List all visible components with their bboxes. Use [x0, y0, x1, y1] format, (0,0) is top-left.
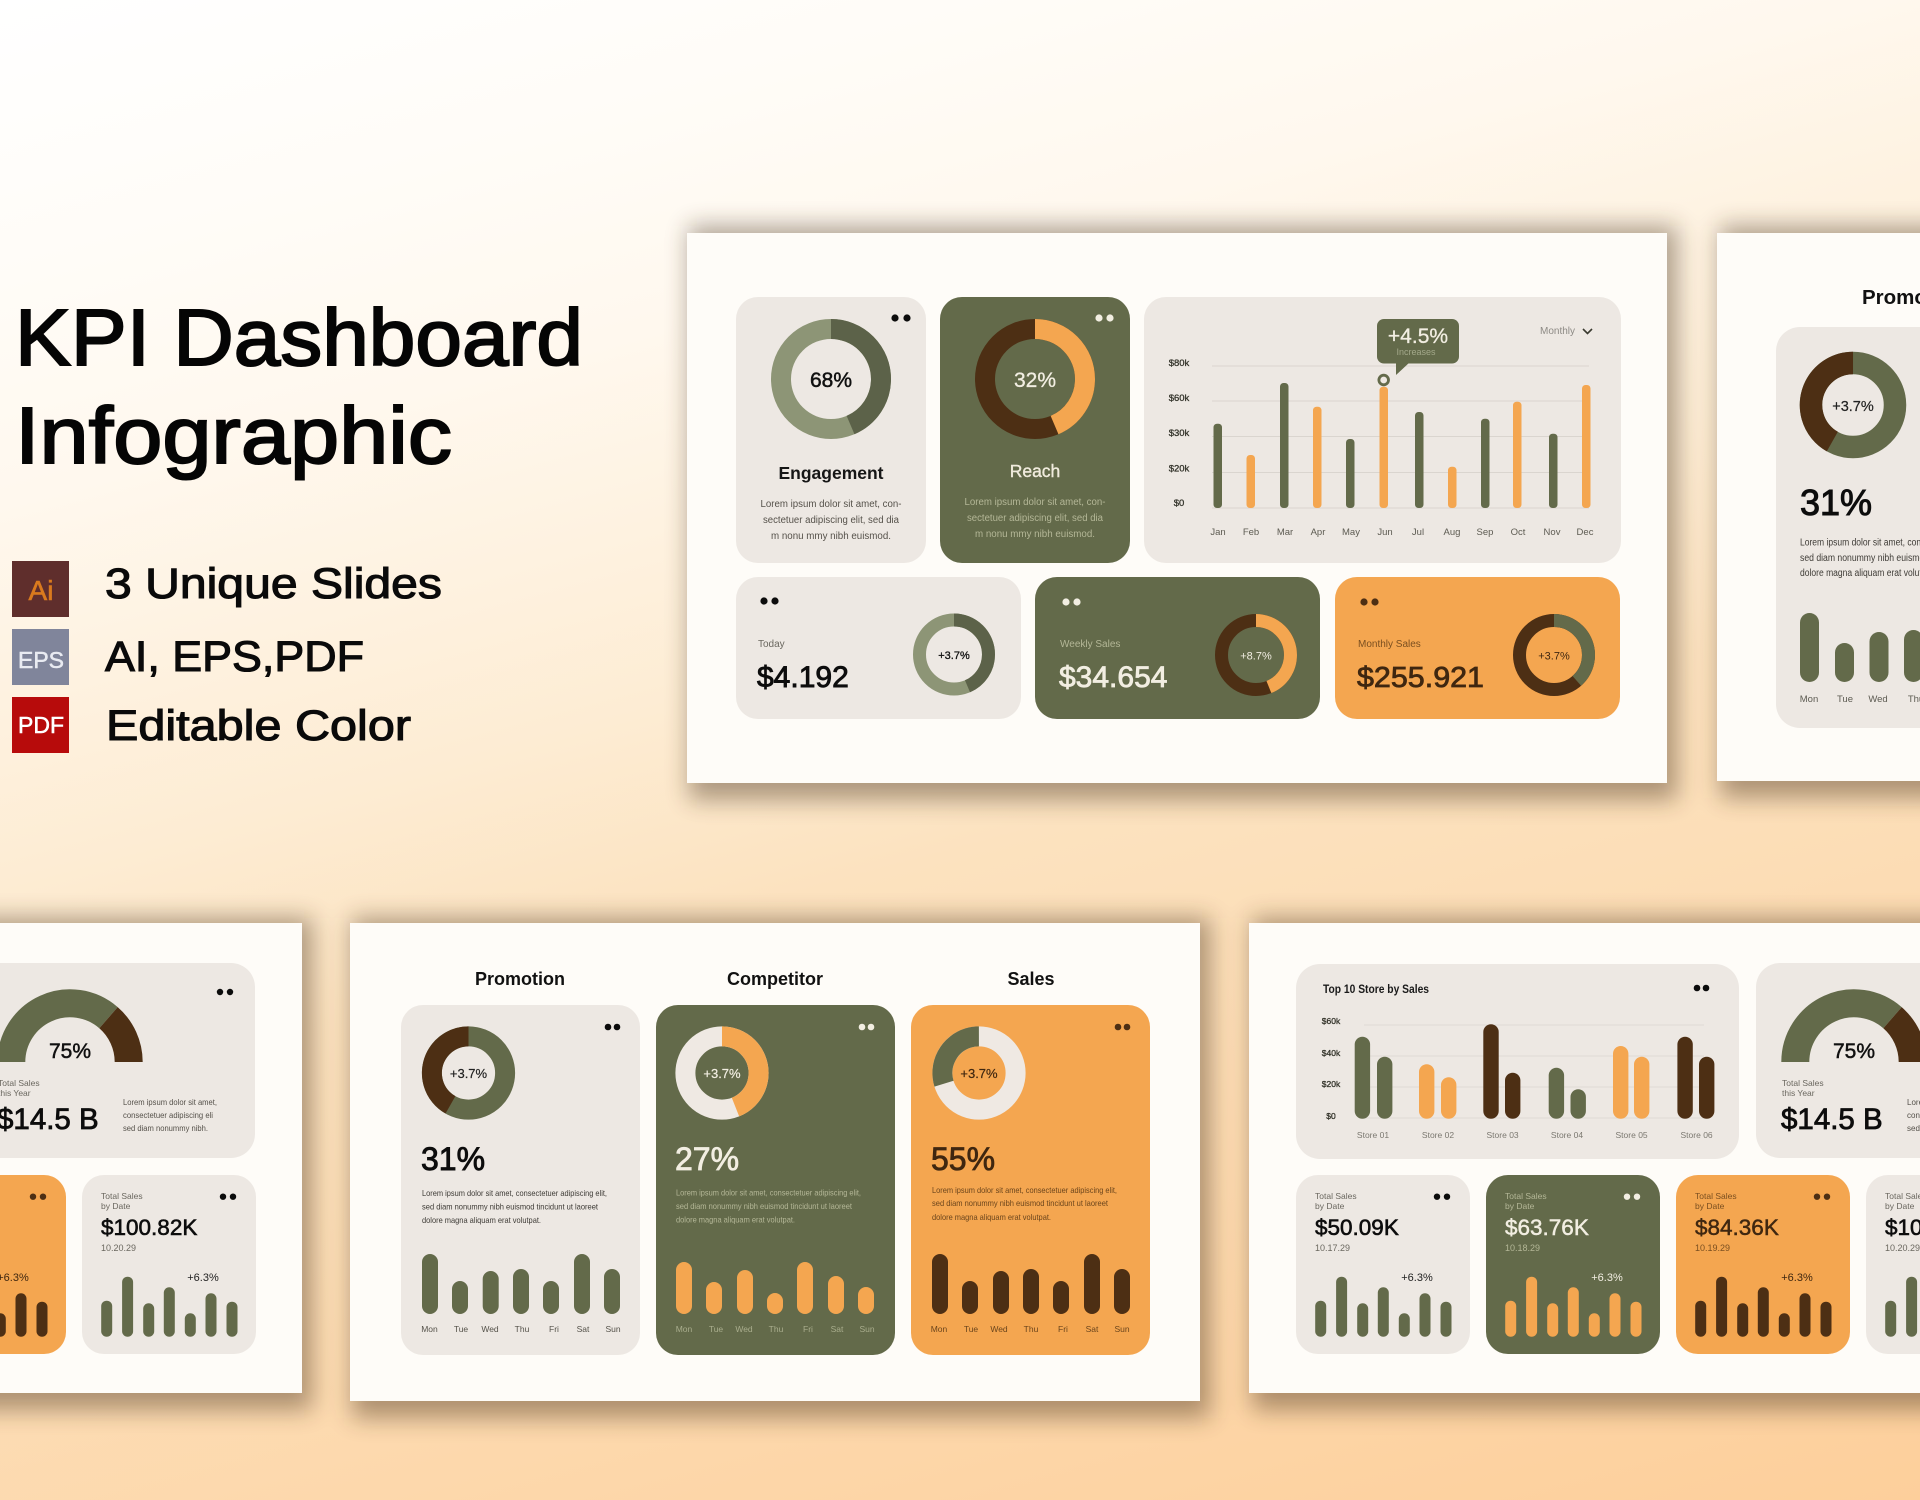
panel: weekly sales: [1035, 577, 1320, 719]
panel: monthly bar chart: [1144, 297, 1621, 563]
panel: monthly sales: Monthly Sales: [1358, 639, 1421, 650]
day labels: Sun: [1114, 1324, 1130, 1334]
mini bars: [1885, 1277, 1917, 1337]
text block: dolore magna aliquam erat volutpat.: [932, 1212, 1051, 1222]
store labels: Store 04: [1551, 1130, 1583, 1140]
label: by Date: [1885, 1201, 1915, 1211]
value: 31%: [1800, 482, 1872, 523]
value: 55%: [931, 1141, 995, 1177]
heading: sales: Sales: [1007, 969, 1055, 989]
text block: dolore magna aliquam erat volutpat.: [422, 1215, 541, 1225]
icon: EPS file: [12, 629, 69, 685]
value: $34.654: [1059, 661, 1167, 694]
label: Total Sales: [1782, 1078, 1824, 1088]
mini bars: [1800, 613, 1920, 682]
value: $84.36K: [1695, 1215, 1779, 1240]
mini bars: [101, 1277, 238, 1337]
y axis labels: $80k: [1169, 358, 1190, 369]
text block: [932, 1185, 1117, 1222]
mini bars: [0, 1293, 48, 1337]
period selector: Monthly: [1540, 326, 1575, 337]
panel: promotion card: [1776, 327, 1920, 728]
donut: [419, 1023, 518, 1123]
month labels: [1210, 527, 1594, 538]
donut: [685, 1036, 759, 1110]
panel: weekly sales: Weekly Sales: [1060, 639, 1120, 650]
icon: PDF file: PDF: [18, 712, 64, 738]
text block: [760, 499, 902, 542]
text block: Lorem ipsum dolor sit amet,: [123, 1098, 217, 1107]
label: [1782, 1078, 1824, 1098]
slide: main dashboard: [687, 233, 1667, 783]
slide: store sales: [1249, 923, 1920, 1393]
day labels: Tue: [454, 1324, 468, 1334]
panel: date card 50.09K: +6.3%: [1401, 1272, 1433, 1284]
day labels: Sat: [577, 1324, 590, 1334]
y axis labels: $0: [1326, 1111, 1336, 1121]
icon: menu dots: [760, 597, 779, 605]
day labels: [1800, 694, 1920, 705]
text block: consectetuer adipiscing eli: [123, 1111, 213, 1120]
title: Infographic: [15, 391, 452, 480]
donut: [1520, 620, 1588, 690]
text block: Lorem ipsum dolor sit amet, con-: [760, 499, 902, 510]
icon: menu dots: [1624, 1194, 1640, 1200]
day labels: Fri: [1058, 1324, 1068, 1334]
value: $14.5 B: [1781, 1103, 1883, 1136]
icon: menu dots: [859, 1024, 874, 1030]
icon: menu dots: [1814, 1194, 1830, 1200]
label: by Date: [101, 1201, 131, 1211]
text block: [123, 1098, 217, 1133]
panel: date card 84.36K: 10.19.29: [1695, 1243, 1730, 1253]
icon: menu dots: [1062, 598, 1081, 606]
icon: menu dots: [891, 314, 911, 322]
store labels: Store 05: [1616, 1130, 1648, 1140]
heading: Engagement: [778, 463, 884, 483]
text block: sed diam nonummy nibh euismod tincidunt ut laoreet: [676, 1201, 853, 1211]
panel: date card 63.76K: 10.18.29: [1505, 1243, 1540, 1253]
store labels: Store 01: [1357, 1130, 1389, 1140]
text block: dolore magna aliquam erat volutpat.: [676, 1214, 795, 1224]
day labels: Sun: [605, 1324, 621, 1334]
month labels: Jun: [1377, 527, 1393, 538]
donut: +8.7%: [1240, 650, 1272, 662]
label: Total Sales: [1695, 1191, 1737, 1201]
donut: +3.7%: [450, 1066, 488, 1081]
value: $255.921: [1357, 662, 1484, 694]
panel: date card 63.76K: [1486, 1175, 1660, 1354]
icon: menu dots: [220, 1194, 236, 1200]
value: $14.5 B: [0, 1103, 99, 1136]
chart title: Top 10 Store by Sales: [1323, 984, 1429, 996]
icon: EPS file: EPS: [18, 647, 64, 673]
value: 27%: [675, 1141, 739, 1177]
panel: date card 63.76K: +6.3%: [1591, 1272, 1623, 1284]
icon: menu dots: [1434, 1194, 1450, 1200]
panel: today: [736, 577, 1021, 719]
month labels: Nov: [1544, 527, 1561, 538]
donut: +3.7%: [938, 650, 970, 662]
panel: engagement: [736, 297, 926, 563]
text block: Lorem ipsum dolor sit amet, con-: [964, 497, 1106, 508]
icon: menu dots: [1360, 598, 1379, 606]
panel: reach: [940, 297, 1130, 563]
donut: +3.7%: [960, 1066, 998, 1081]
mini bars: [676, 1262, 874, 1314]
month labels: Mar: [1277, 527, 1293, 538]
gauge: 75%: [49, 1040, 91, 1063]
mini bars: [1695, 1277, 1832, 1337]
donut: 68%: [781, 329, 881, 429]
y axis labels: [1322, 1016, 1341, 1121]
donut: [1222, 620, 1290, 690]
day labels: Wed: [735, 1324, 753, 1334]
label: [101, 1191, 143, 1211]
panel: sales: [911, 1005, 1150, 1355]
text block: sed diam nonummy nibh euismod tincidunt ut laoreet: [422, 1202, 599, 1212]
gauge: 75%: [1833, 1040, 1875, 1063]
panel: date card 50.09K: 10.17.29: [1315, 1243, 1350, 1253]
donut: 32%: 32%: [1014, 369, 1056, 392]
label: Total Sales: [1315, 1191, 1357, 1201]
label: [1505, 1191, 1547, 1211]
text block: m nonu mmy nibh euismod.: [975, 529, 1095, 540]
label: Total Sales: [101, 1191, 143, 1201]
mini bars: [1505, 1277, 1642, 1337]
label: by Date: [1505, 1201, 1535, 1211]
day labels: Sat: [1086, 1324, 1099, 1334]
day labels: Mon: [931, 1324, 948, 1334]
icon: menu dots: [1095, 314, 1114, 322]
day labels: Fri: [803, 1324, 813, 1334]
panel: total sales gauge: [0, 963, 255, 1158]
day labels: [931, 1324, 1130, 1334]
panel: grey date card: +6.3%: [187, 1272, 219, 1284]
value: $4.192: [757, 661, 849, 694]
icon: menu dots: [217, 989, 233, 995]
panel: promotion: [401, 1005, 640, 1355]
day labels: Wed: [481, 1324, 499, 1334]
month labels: Feb: [1243, 527, 1259, 538]
label: [0, 1078, 40, 1098]
panel: date card 84.36K: [1676, 1175, 1850, 1354]
text block: [422, 1188, 607, 1225]
y axis labels: $20k: [1322, 1079, 1341, 1089]
panel: date card 84.36K: +6.3%: [1781, 1272, 1813, 1284]
day labels: Fri: [549, 1324, 559, 1334]
day labels: Thu: [769, 1324, 784, 1334]
y axis labels: $40k: [1322, 1048, 1341, 1058]
label: [1315, 1191, 1357, 1211]
text block: [676, 1188, 861, 1224]
panel: orange date card: [0, 1175, 66, 1354]
month labels: Jan: [1210, 527, 1226, 538]
slide: total sales cropped at left: [0, 923, 302, 1393]
day labels: Mon: [1800, 694, 1818, 705]
y axis labels: $0: [1174, 498, 1184, 509]
heading: Reach: [1010, 461, 1060, 481]
label: [1885, 1191, 1920, 1211]
mini bars: [422, 1254, 620, 1314]
feature list: [12, 560, 442, 753]
day labels: Tue: [964, 1324, 978, 1334]
donut: +3.7%: [1832, 399, 1874, 415]
panel: today: Today: [758, 639, 785, 650]
icon: menu dots: [30, 1194, 46, 1200]
donut: 68%: 68%: [810, 369, 852, 392]
y axis labels: $60k: [1169, 393, 1190, 404]
panel: date card 50.09K: [1296, 1175, 1470, 1354]
month labels: Jul: [1412, 527, 1424, 538]
month labels: Oct: [1511, 527, 1526, 538]
callout: Increases: [1396, 347, 1436, 357]
title: KPI Dashboard: [15, 293, 583, 382]
title: [15, 293, 583, 480]
panel: monthly sales: [1335, 577, 1620, 719]
heading: promotion: Promotion: [475, 969, 565, 989]
label: by Date: [1315, 1201, 1345, 1211]
y axis labels: $30k: [1169, 428, 1190, 439]
text block: [1800, 538, 1920, 579]
label: this Year: [1782, 1088, 1815, 1098]
day labels: Sat: [831, 1324, 844, 1334]
icon: menu dots: [1115, 1024, 1130, 1030]
value: 31%: [421, 1141, 485, 1177]
slide shadows: [0, 226, 1920, 1418]
day labels: Wed: [1868, 694, 1888, 705]
bars: [1214, 383, 1590, 508]
slide: promotion cropped at right: [1717, 233, 1920, 781]
store labels: Store 03: [1487, 1130, 1519, 1140]
icon: Ai file: [12, 561, 69, 617]
month labels: Sep: [1477, 527, 1493, 538]
mini bars: [932, 1254, 1130, 1314]
month labels: May: [1342, 527, 1360, 538]
label: Total Sales: [1505, 1191, 1547, 1201]
day labels: Mon: [676, 1324, 693, 1334]
slide: promotion competitor sales: [350, 923, 1200, 1401]
store labels: [1357, 1130, 1713, 1140]
text block: [1907, 1098, 1920, 1133]
feature: formats: AI, EPS,PDF: [105, 633, 364, 681]
day labels: Thu: [1024, 1324, 1039, 1334]
store labels: Store 02: [1422, 1130, 1454, 1140]
text block: m nonu mmy nibh euismod.: [771, 531, 891, 542]
day labels: [421, 1324, 621, 1334]
day labels: Thu: [515, 1324, 530, 1334]
month labels: Dec: [1577, 527, 1594, 538]
feature: slides: 3 Unique Slides: [105, 560, 442, 608]
icon: menu dots: [1694, 985, 1709, 991]
store labels: Store 06: [1681, 1130, 1713, 1140]
panel: grey date card: [82, 1175, 256, 1354]
heading: competitor: Competitor: [727, 969, 823, 989]
donut: [920, 620, 988, 689]
y axis labels: [1169, 358, 1190, 509]
donut: +3.7%: [703, 1066, 741, 1081]
donut: [933, 1027, 1025, 1119]
text block: Lorem ipsum dolor sit amet, consectetuer adipiscing elit,: [676, 1188, 861, 1198]
panel: top 10 stores chart: [1296, 964, 1739, 1159]
period selector: [1540, 326, 1592, 337]
day labels: Mon: [421, 1324, 438, 1334]
value: $50.09K: [1315, 1215, 1399, 1240]
grouped bars: [1355, 1024, 1714, 1119]
value: $63.76K: [1505, 1215, 1589, 1240]
day labels: Tue: [1837, 694, 1853, 705]
icon: PDF file: [12, 697, 69, 753]
gauge: [1795, 1003, 1913, 1063]
y axis labels: $60k: [1322, 1016, 1341, 1026]
label: [1695, 1191, 1737, 1211]
panel: grey date card: 10.20.29: [101, 1243, 136, 1253]
donut: 32%: [985, 329, 1085, 429]
day labels: Wed: [990, 1324, 1008, 1334]
month labels: Aug: [1444, 527, 1460, 538]
donut: [1796, 348, 1910, 462]
text block: Lorem ipsum dolor sit amet, consectetuer adipiscing elit,: [422, 1188, 607, 1198]
mini bars: [1315, 1277, 1452, 1337]
day labels: Sun: [859, 1324, 875, 1334]
text block: Lorem ipsum dolor sit amet, consectetuer adipiscing elit,: [932, 1185, 1117, 1195]
text block: [964, 497, 1106, 540]
value: $100.82K: [101, 1215, 197, 1240]
text block: sectetuer adipiscing elit, sed dia: [967, 513, 1103, 524]
text block: sed diam nonummy nibh euismod tincidunt ut laoreet: [932, 1198, 1109, 1208]
month labels: Apr: [1311, 527, 1325, 538]
text block: sed diam nonummy nibh.: [123, 1124, 208, 1133]
panel: competitor: [656, 1005, 895, 1355]
y axis labels: $20k: [1169, 464, 1190, 474]
day labels: [676, 1324, 875, 1334]
donut: +3.7%: [1538, 650, 1570, 662]
feature: colors: Editable Color: [106, 702, 411, 750]
icon: Ai file: Ai: [29, 575, 53, 606]
gauge: [11, 1003, 129, 1063]
panel: date card 100.82K: [1866, 1175, 1920, 1354]
panel: date card 100.82K: 10.20.29: [1885, 1243, 1920, 1253]
callout: [1377, 319, 1459, 375]
panel: total sales gauge: [1756, 963, 1920, 1158]
callout: +4.5%: [1388, 325, 1448, 348]
text block: sectetuer adipiscing elit, sed dia: [763, 515, 899, 526]
marker: [1379, 375, 1388, 385]
icon: menu dots: [605, 1024, 620, 1030]
label: by Date: [1695, 1201, 1725, 1211]
day labels: Tue: [709, 1324, 723, 1334]
